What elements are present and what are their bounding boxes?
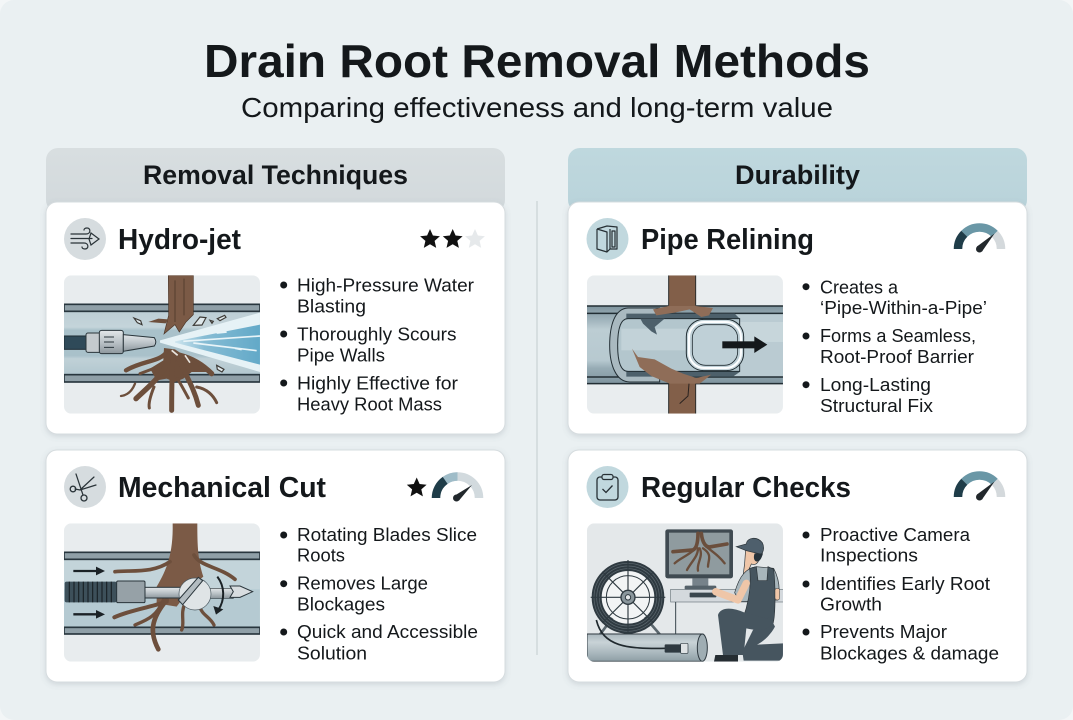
card title: regular checks: Regular Checks: [641, 472, 851, 504]
title: Drain Root Removal Methods: [204, 35, 870, 87]
feature list: hydro-jet: Blasting: [297, 296, 366, 316]
gauge: high durability: [958, 476, 1001, 500]
feature list: mechanical cut: Roots: [297, 545, 345, 566]
rating: two of three stars: [420, 229, 485, 248]
subtitle: Comparing effectiveness and long-term value: [241, 92, 833, 123]
card: mechanical cut: [46, 450, 505, 682]
feature list: pipe relining: Creates a: [820, 276, 899, 298]
icon: scissors: [64, 466, 106, 508]
card: pipe relining: [568, 202, 1027, 434]
icon: clipboard check: [586, 466, 628, 508]
heading: durability: Durability: [735, 160, 860, 190]
feature list: hydro-jet: [280, 274, 474, 414]
card title: pipe relining: Pipe Relining: [641, 224, 814, 256]
illustration: relined pipe: [587, 275, 783, 414]
panel: durability header: [568, 148, 1027, 212]
rating: one star: [407, 478, 427, 496]
feature list: pipe relining: Root-Proof Barrier: [820, 346, 974, 367]
feature list: hydro-jet: Highly Effective for: [297, 372, 458, 394]
feature list: hydro-jet: Thoroughly Scours: [297, 324, 456, 344]
feature list: mechanical cut: Quick and Accessible: [297, 621, 478, 642]
feature list: regular checks: Growth: [820, 594, 882, 615]
panel: removal techniques header: [46, 148, 505, 212]
feature list: regular checks: Identifies Early Root: [820, 573, 990, 594]
card title: hydro-jet: Hydro-jet: [118, 224, 241, 256]
feature list: mechanical cut: Removes Large: [297, 573, 428, 594]
feature list: mechanical cut: Rotating Blades Slice: [297, 524, 477, 545]
feature list: mechanical cut: Blockages: [297, 594, 385, 615]
feature list: hydro-jet: High-Pressure Water: [297, 274, 474, 296]
feature list: regular checks: [802, 524, 999, 664]
feature list: regular checks: Inspections: [820, 545, 918, 566]
gauge: high durability: [958, 228, 1001, 252]
feature list: pipe relining: Structural Fix: [820, 395, 934, 416]
feature list: regular checks: Blockages & damage: [820, 642, 999, 664]
card: regular checks: [568, 450, 1027, 682]
feature list: pipe relining: [802, 276, 987, 416]
card title: mechanical cut: Mechanical Cut: [118, 472, 327, 504]
feature list: pipe relining: Forms a Seamless,: [820, 325, 976, 346]
illustration: technician with camera reel and monitor: [587, 523, 784, 662]
illustration: mechanical cutter in pipe: [64, 523, 260, 662]
column divider: [536, 201, 538, 655]
feature list: regular checks: Prevents Major: [820, 621, 947, 642]
icon: air and water jet: [64, 218, 106, 260]
feature list: mechanical cut: Solution: [297, 642, 367, 664]
feature list: pipe relining: ‘Pipe-Within-a-Pipe’: [820, 297, 987, 318]
heading: removal techniques: Removal Techniques: [143, 160, 408, 190]
illustration: hydro-jet in pipe: [64, 275, 260, 414]
card: hydro-jet: [46, 202, 505, 434]
feature list: regular checks: Proactive Camera: [820, 524, 971, 545]
feature list: hydro-jet: Pipe Walls: [297, 344, 385, 366]
feature list: hydro-jet: Heavy Root Mass: [297, 394, 442, 414]
feature list: mechanical cut: [280, 524, 478, 664]
gauge: low-medium: [436, 476, 479, 502]
icon: pipe liner: [586, 218, 628, 260]
feature list: pipe relining: Long-Lasting: [820, 374, 931, 395]
